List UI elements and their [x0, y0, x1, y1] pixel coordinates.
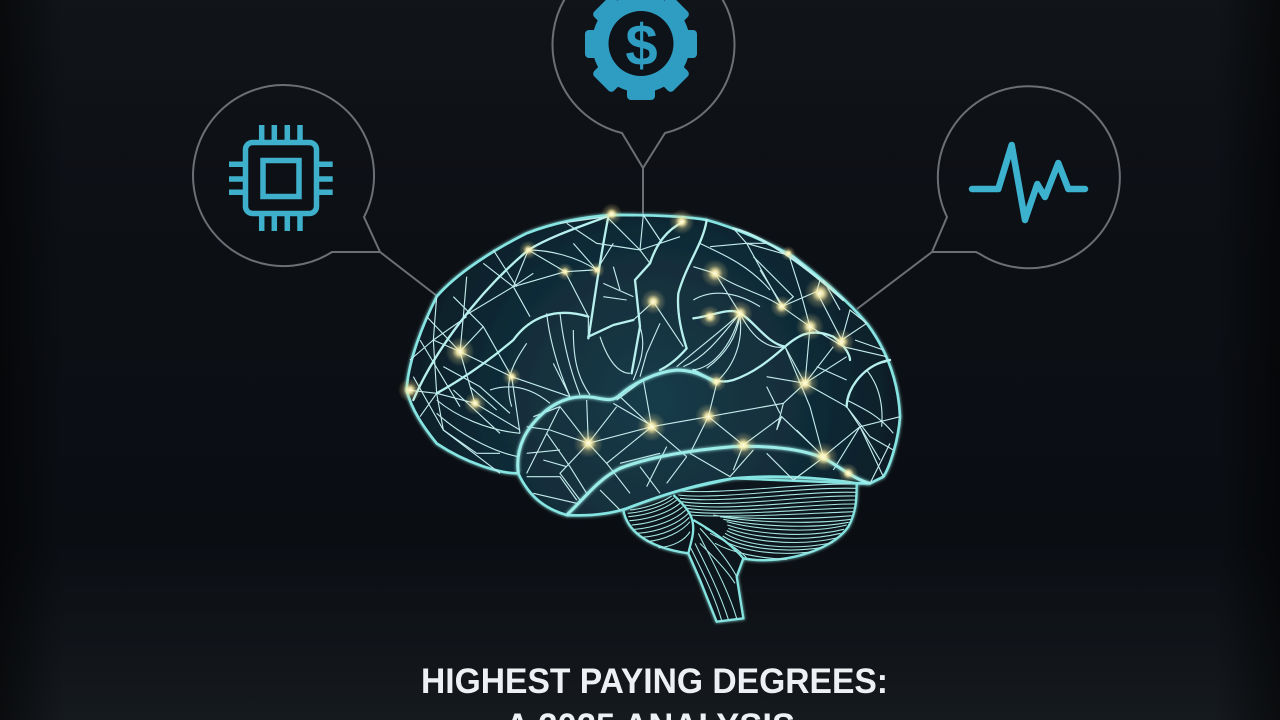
callout bubble: pulse	[857, 86, 1120, 309]
cerebrum outline	[407, 215, 900, 515]
callout bubble: chip	[193, 85, 437, 296]
cerebellum and brainstem	[623, 478, 857, 622]
icon: pulse line	[972, 145, 1085, 220]
title	[421, 662, 888, 720]
title: HIGHEST PAYING DEGREES:	[421, 662, 888, 701]
callout: chip	[193, 85, 437, 296]
glowing neural nodes	[398, 203, 858, 483]
callout: finance	[553, 0, 734, 214]
callout: health pulse	[857, 86, 1120, 309]
thin neural mesh	[407, 215, 900, 510]
temporal lobe	[518, 370, 870, 515]
brain illustration	[398, 203, 900, 622]
callout bubble: finance	[553, 0, 734, 214]
major sulci	[413, 217, 890, 407]
icon: dollar gear: $	[625, 13, 658, 78]
icon: dollar gear	[585, 0, 697, 100]
icon: microchip	[229, 125, 333, 231]
